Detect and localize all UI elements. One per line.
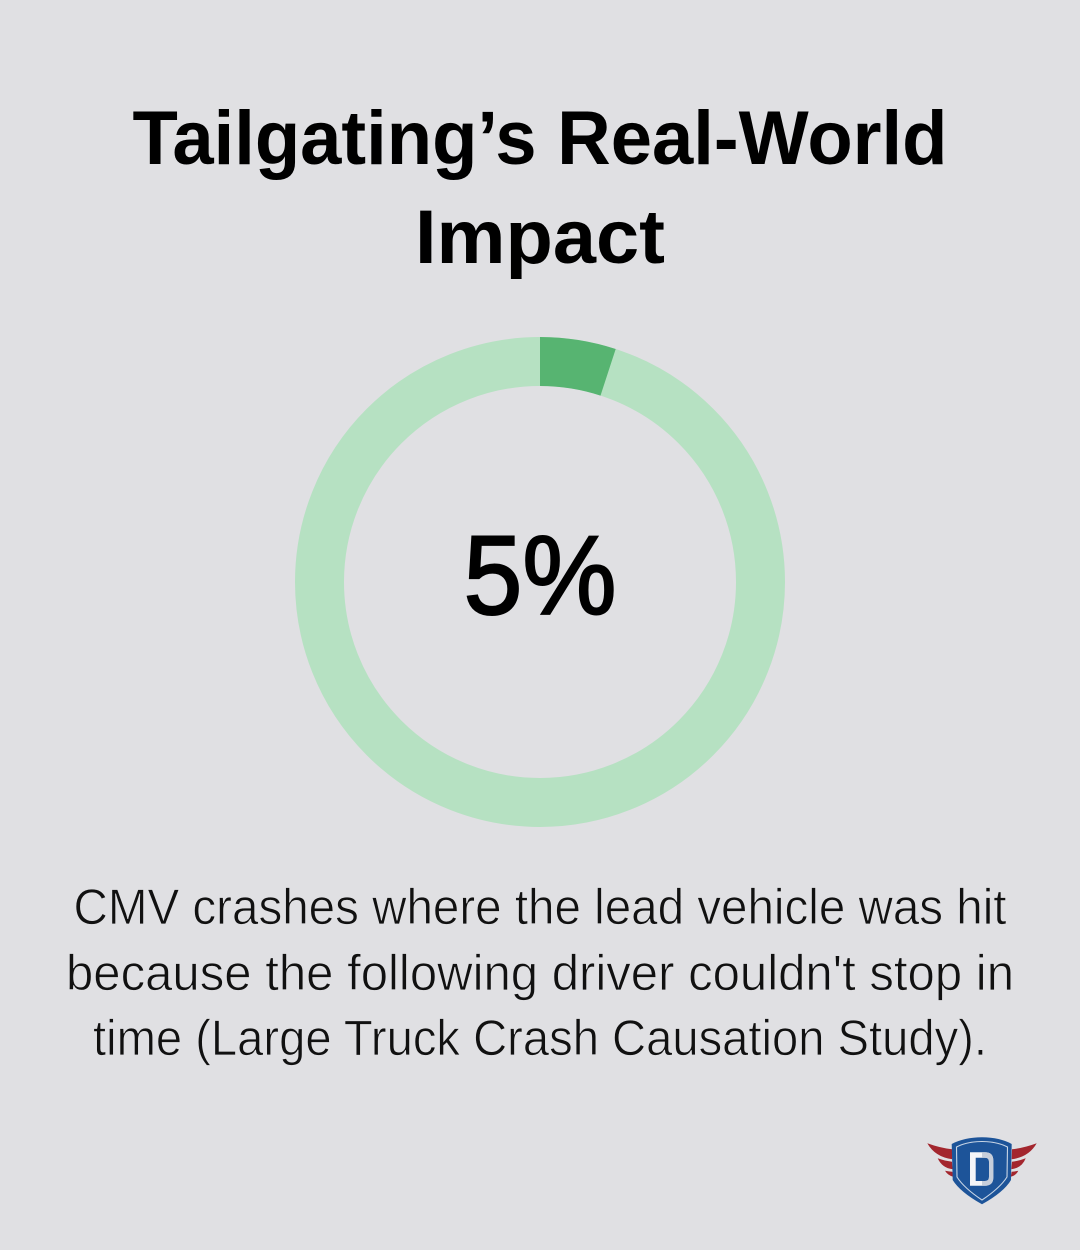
icon: shield logo with wings: [927, 1137, 1037, 1204]
description text: time (Large Truck Crash Causation Study).: [93, 1010, 987, 1066]
center value: 5%: [464, 513, 616, 638]
description text: CMV crashes where the lead vehicle was hit: [74, 879, 1007, 935]
description text: [66, 879, 1014, 1066]
title: Tailgating’s Real-World: [132, 96, 948, 181]
description text: because the following driver couldn't stop in: [66, 945, 1014, 1001]
title: [132, 96, 948, 280]
donut chart: 5%: [320, 337, 760, 802]
title: Impact: [415, 195, 665, 280]
